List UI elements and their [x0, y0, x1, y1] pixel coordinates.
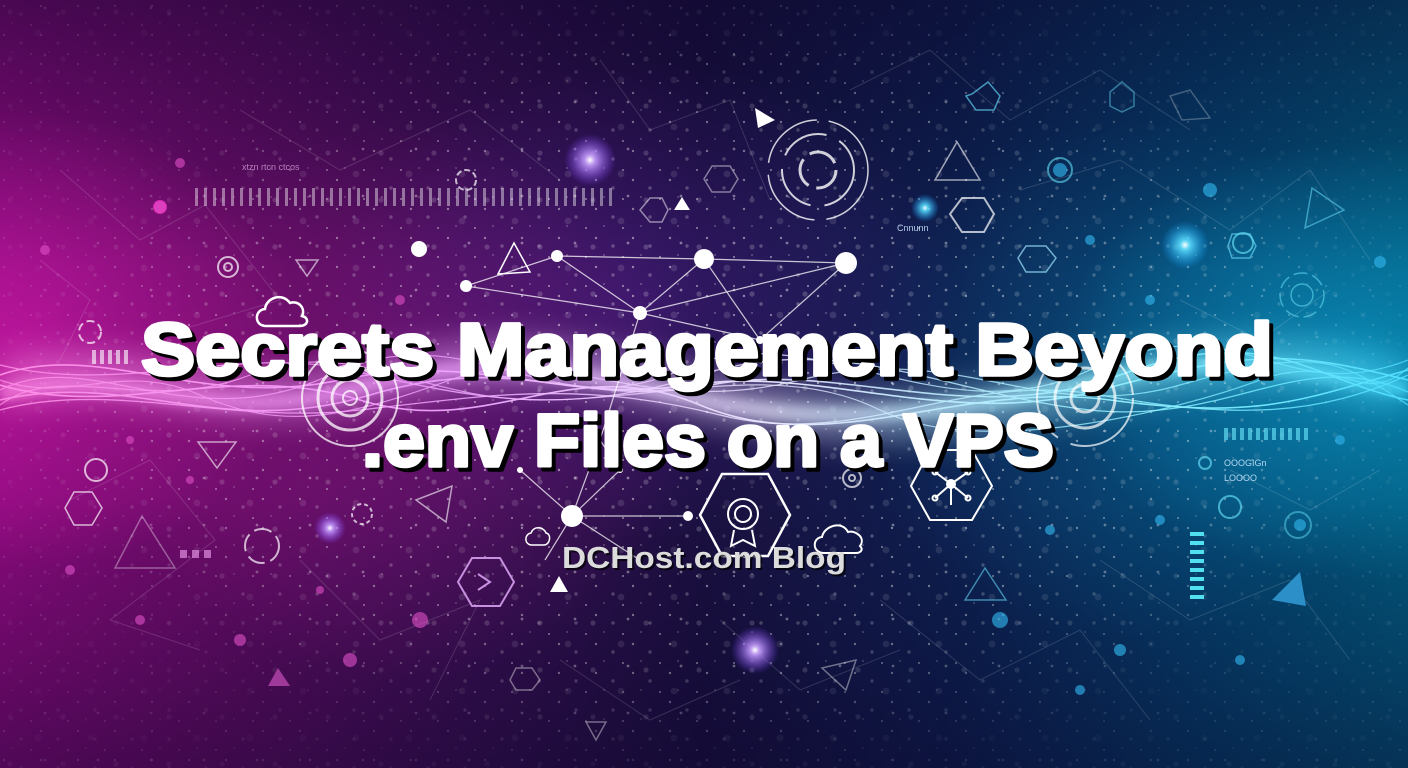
micro text right: OOOGIGn	[1224, 458, 1267, 468]
micro text right: Cnnunn	[897, 223, 929, 233]
outline hexagons	[65, 82, 1256, 690]
barcode strip left	[195, 188, 612, 206]
title: Secrets Management Beyond	[141, 308, 1273, 391]
glowing sparks	[153, 134, 1209, 674]
title: Secrets Management Beyond	[145, 312, 1277, 395]
outline triangles	[115, 90, 1344, 740]
subtitle: DCHost.com Blog	[564, 542, 848, 577]
micro text right	[897, 223, 1267, 483]
title	[141, 308, 1277, 486]
icon: cloud top left	[257, 297, 307, 326]
concentric target left	[302, 350, 398, 446]
title: .env Files on a VPS	[366, 403, 1058, 486]
subtitle: DCHost.com Blog	[562, 540, 846, 575]
icon: terminal hexagon	[458, 558, 514, 606]
icon: cloud lower	[526, 525, 862, 553]
micro text right: LOOOO	[1224, 473, 1257, 483]
solid triangles	[268, 108, 1306, 686]
icon: hexagon badge	[700, 474, 790, 556]
icon: concentric target far right	[1280, 273, 1324, 317]
icon: hexagon network	[911, 450, 992, 520]
small circle icons	[79, 158, 1311, 563]
glowing wave band	[0, 346, 1408, 431]
micro text top left: xtzn rtcn ctcos	[242, 162, 300, 172]
central network constellation	[411, 241, 857, 560]
title: .env Files on a VPS	[362, 399, 1054, 482]
bokeh dots	[40, 158, 1386, 695]
concentric target right	[1037, 350, 1133, 446]
bar strips	[92, 350, 1308, 599]
concentric target top right	[768, 120, 868, 220]
